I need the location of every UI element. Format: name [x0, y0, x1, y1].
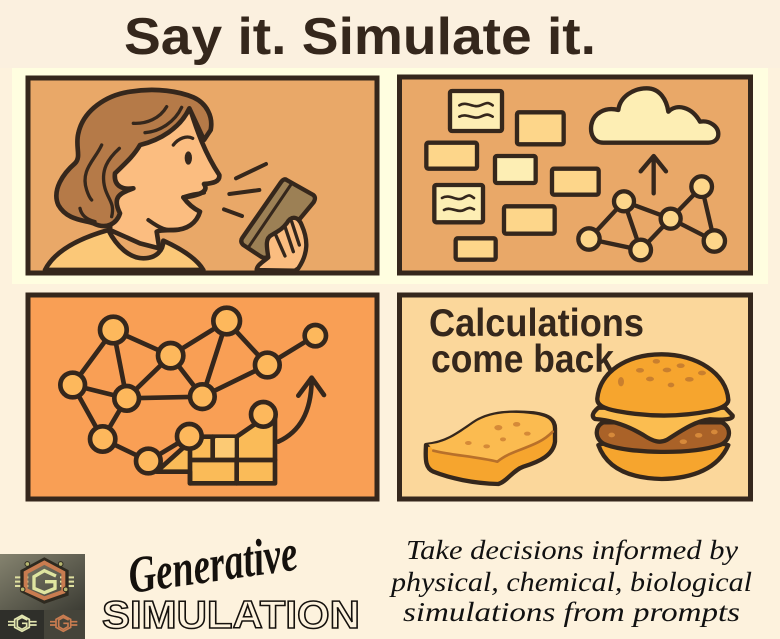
title: Say it. Simulate it.: [124, 8, 596, 66]
icon: face: [110, 108, 219, 248]
icon: block chart: [157, 418, 275, 483]
tagline: physical, chemical, biological: [389, 567, 752, 597]
icon: mouth: [183, 193, 204, 197]
icon: hair: [56, 90, 211, 226]
network graph: [578, 176, 725, 260]
brand: Simulation: SIMULATION: [102, 594, 360, 637]
icon: cloud: [591, 88, 718, 143]
icon: main hexagon G: [15, 561, 74, 601]
panel: calculations come back: [400, 295, 750, 499]
icon: curved arrow: [278, 378, 324, 442]
panel: documents to cloud and graph: [400, 77, 750, 273]
document cards: [426, 91, 599, 260]
icon: hand: [257, 218, 306, 271]
icon: small orange G: [50, 615, 77, 631]
icon: eye and brow: [173, 137, 193, 145]
heading: come back: come back: [431, 338, 614, 381]
network graph: [60, 308, 326, 473]
logo: [0, 554, 85, 639]
panel: simulation network: [28, 295, 377, 499]
icon: phone: [241, 179, 315, 258]
panel: speaking to phone: [28, 78, 377, 273]
icon: speech lines: [224, 164, 266, 216]
brand: Generative: Generative: [125, 525, 301, 605]
light backing panel: [12, 68, 768, 284]
icon: up arrow: [641, 156, 666, 193]
tagline: simulations from prompts: [403, 597, 740, 627]
icon: bread slice: [426, 413, 555, 484]
tagline: [389, 535, 752, 627]
tagline: Take decisions informed by: [406, 535, 738, 565]
icon: shirt: [45, 230, 203, 270]
heading: calculations: Calculations: [429, 302, 644, 345]
icon: small light G: [8, 615, 37, 631]
icon: burger: [593, 354, 733, 479]
